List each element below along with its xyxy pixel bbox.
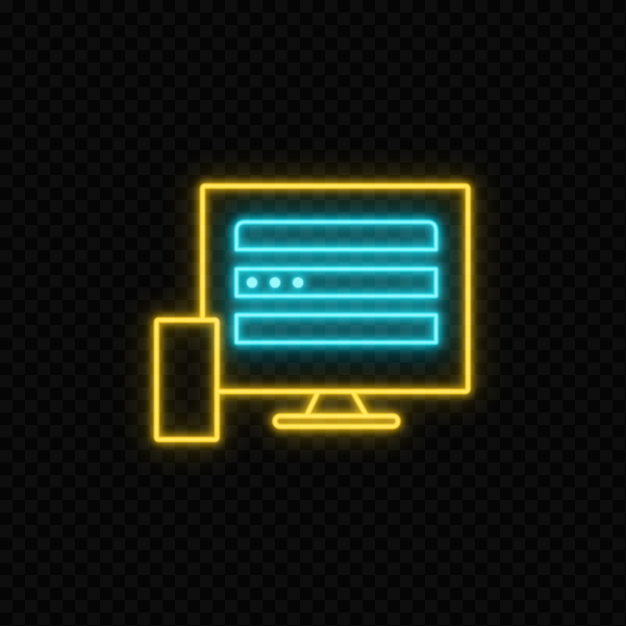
monitor and phone outline in yellow neon [156,186,468,440]
login form panel in blue neon [236,222,436,342]
soft ambient glow [156,186,468,440]
password dots [244,274,306,290]
